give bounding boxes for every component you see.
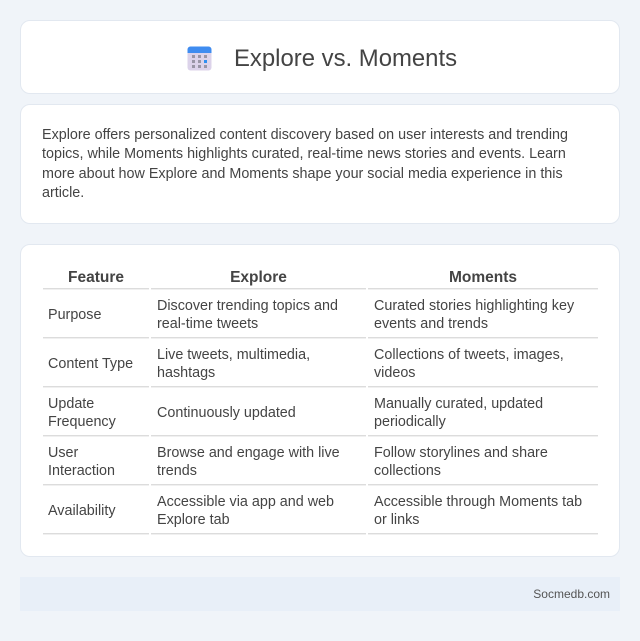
intro paragraph — [42, 127, 568, 201]
intro paragraph: article. — [42, 185, 84, 201]
row: Content Type: Collections of tweets, images, — [374, 347, 564, 363]
footer source text: Socmedb.com — [533, 587, 610, 601]
row: Availability: Accessible through Moments tab — [374, 494, 582, 510]
icon: calendar — [188, 46, 212, 70]
intro paragraph: topics, while Moments highlights curated, real-time news stories and events. Learn — [42, 146, 566, 162]
row: User Interaction: Browse and engage with live — [157, 445, 340, 461]
row: Content Type: videos — [374, 365, 415, 381]
row: Update Frequency: Continuously updated — [157, 405, 296, 421]
row: Availability — [48, 494, 582, 528]
footer bar — [20, 577, 620, 611]
table header: Moments — [449, 269, 517, 286]
row: User Interaction — [48, 445, 548, 479]
row: Update Frequency — [48, 396, 543, 430]
row: Purpose — [48, 298, 574, 332]
row: Update Frequency: Frequency — [48, 414, 116, 430]
row: Availability: Accessible via app and web — [157, 494, 334, 510]
row: Update Frequency: Manually curated, updated — [374, 396, 543, 412]
panel: comparison table — [20, 244, 620, 557]
row: Availability: Availability — [48, 503, 116, 519]
row: Content Type: hashtags — [157, 365, 215, 381]
row: Availability: or links — [374, 512, 419, 528]
row: User Interaction: trends — [157, 463, 197, 479]
row: Purpose: Discover trending topics and — [157, 298, 338, 314]
row: Purpose: events and trends — [374, 316, 488, 332]
row: User Interaction: Interaction — [48, 463, 115, 479]
row: Update Frequency: periodically — [374, 414, 446, 430]
row: Availability: Explore tab — [157, 512, 230, 528]
table header — [68, 269, 517, 286]
title: Explore vs. Moments — [234, 45, 457, 72]
row: Content Type: Content Type — [48, 356, 133, 372]
row: Purpose: real-time tweets — [157, 316, 258, 332]
row: User Interaction: Follow storylines and share — [374, 445, 548, 461]
row: Update Frequency: Update — [48, 396, 94, 412]
row: Content Type: Live tweets, multimedia, — [157, 347, 310, 363]
panel: intro text — [20, 104, 620, 224]
table header: Explore — [230, 269, 287, 286]
table header: Feature — [68, 269, 124, 286]
panel: title card — [20, 20, 620, 94]
row: Purpose: Curated stories highlighting key — [374, 298, 574, 314]
row: User Interaction: collections — [374, 463, 441, 479]
intro paragraph: more about how Explore and Moments shape your social media experience in this — [42, 166, 563, 182]
row: Content Type — [48, 347, 564, 381]
row: User Interaction: User — [48, 445, 78, 461]
row: Purpose: Purpose — [48, 307, 101, 323]
intro paragraph: Explore offers personalized content discovery based on user interests and trending — [42, 127, 568, 143]
